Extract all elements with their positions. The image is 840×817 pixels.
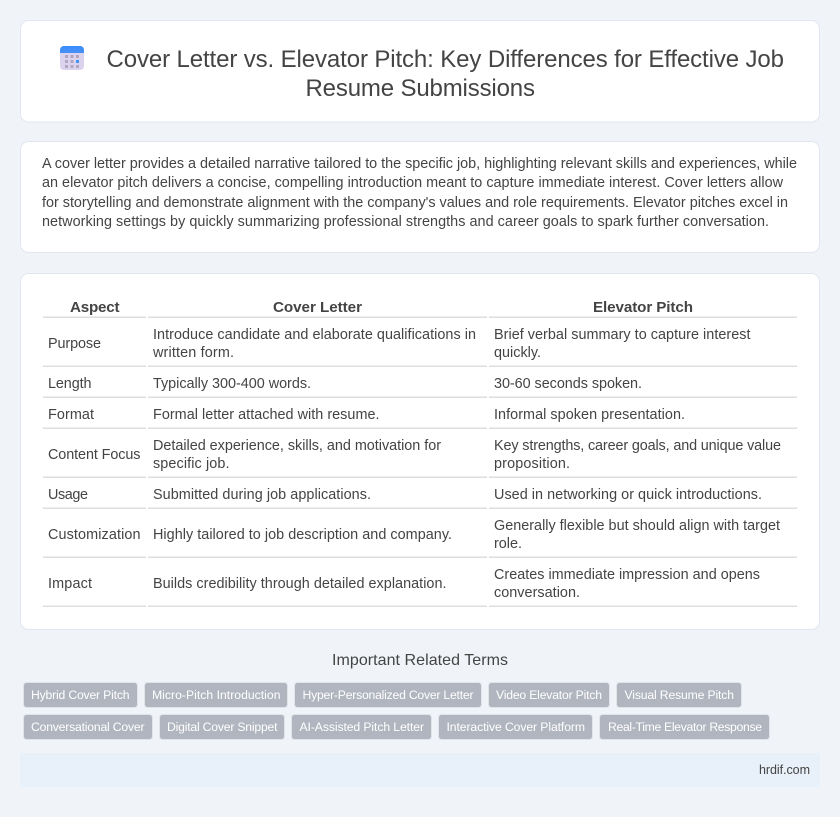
- table header: Elevator Pitch: [593, 299, 693, 316]
- row: customization: Customization: [48, 527, 140, 543]
- table header: Cover Letter: [273, 299, 362, 316]
- text block: summary: networking settings by quickly summarizing professional strengths and career goals to spark further conversation.: [42, 214, 769, 230]
- row: purpose: [48, 327, 750, 361]
- row: purpose: Purpose: [48, 336, 101, 352]
- heading: related terms: Important Related Terms: [332, 652, 508, 669]
- related term tags: Hyper-Personalized Cover Letter: [302, 688, 474, 702]
- row: customization: Generally flexible but should align with target: [494, 518, 780, 534]
- text block: summary: for storytelling and demonstrate alignment with the company's values and role requirements. Elevator pitches excel in: [42, 195, 788, 211]
- row: format: Informal spoken presentation.: [494, 407, 685, 423]
- row: usage: Submitted during job applications.: [153, 487, 371, 503]
- row: length: Typically 300-400 words.: [153, 376, 311, 392]
- row: length: Length: [48, 376, 92, 392]
- related term tags: Hybrid Cover Pitch: [31, 688, 130, 702]
- related term tags: Visual Resume Pitch: [624, 688, 734, 702]
- row: content focus: Content Focus: [48, 447, 140, 463]
- text block: summary: A cover letter provides a detailed narrative tailored to the specific job, highlighting relevant skills and experiences, while: [42, 156, 797, 172]
- row: impact: Builds credibility through detailed explanation.: [153, 576, 446, 592]
- related term tags: Interactive Cover Platform: [446, 720, 585, 734]
- related term tags: Micro-Pitch Introduction: [152, 688, 280, 702]
- text block: summary: [42, 156, 797, 230]
- row: customization: role.: [494, 536, 522, 552]
- related term tags: Video Elevator Pitch: [496, 688, 602, 702]
- footer: hrdif.com: [759, 763, 810, 777]
- row: purpose: Introduce candidate and elaborate qualifications in: [153, 327, 476, 343]
- row: format: [48, 407, 685, 423]
- text block: summary: an elevator pitch delivers a concise, compelling introduction meant to capture immediate interest. Cover letters allow: [42, 175, 784, 191]
- row: purpose: Brief verbal summary to capture interest: [494, 327, 750, 343]
- row: content focus: Detailed experience, skills, and motivation for: [153, 438, 441, 454]
- related term tags: Conversational Cover: [31, 720, 144, 734]
- footer: [20, 753, 820, 787]
- row: format: Formal letter attached with resume.: [153, 407, 380, 423]
- related term tags: AI-Assisted Pitch Letter: [300, 720, 424, 734]
- row: content focus: specific job.: [153, 456, 230, 472]
- row: content focus: proposition.: [494, 456, 570, 472]
- row: customization: Highly tailored to job description and company.: [153, 527, 452, 543]
- panel: title header: [20, 20, 820, 122]
- row: purpose: quickly.: [494, 345, 541, 361]
- icon: calendar: [60, 46, 84, 70]
- row: customization: [48, 518, 780, 552]
- title: Resume Submissions: [306, 75, 535, 102]
- row: format: Format: [48, 407, 94, 423]
- row: usage: [48, 487, 762, 503]
- row: impact: Impact: [48, 576, 92, 592]
- panel: summary paragraph: [20, 142, 820, 252]
- related term tags: Real-Time Elevator Response: [608, 720, 762, 734]
- row: impact: [48, 567, 760, 601]
- row: purpose: written form.: [152, 345, 234, 361]
- table header: Aspect: [70, 299, 120, 316]
- row: usage: Used in networking or quick introductions.: [494, 487, 762, 503]
- related term tags: Digital Cover Snippet: [167, 720, 278, 734]
- row: content focus: [48, 438, 781, 472]
- title: Cover Letter vs. Elevator Pitch: Key Differences for Effective Job: [106, 46, 784, 73]
- row: length: [48, 376, 642, 392]
- related term tags: [24, 682, 770, 740]
- panel: comparison table: [20, 274, 820, 630]
- title: [106, 46, 784, 102]
- row: usage: Usage: [48, 487, 88, 503]
- row: impact: Creates immediate impression and opens: [494, 567, 760, 583]
- row: length: 30-60 seconds spoken.: [494, 376, 642, 392]
- row: content focus: Key strengths, career goals, and unique value: [494, 438, 781, 454]
- row: impact: conversation.: [494, 585, 580, 601]
- table header: [70, 299, 693, 316]
